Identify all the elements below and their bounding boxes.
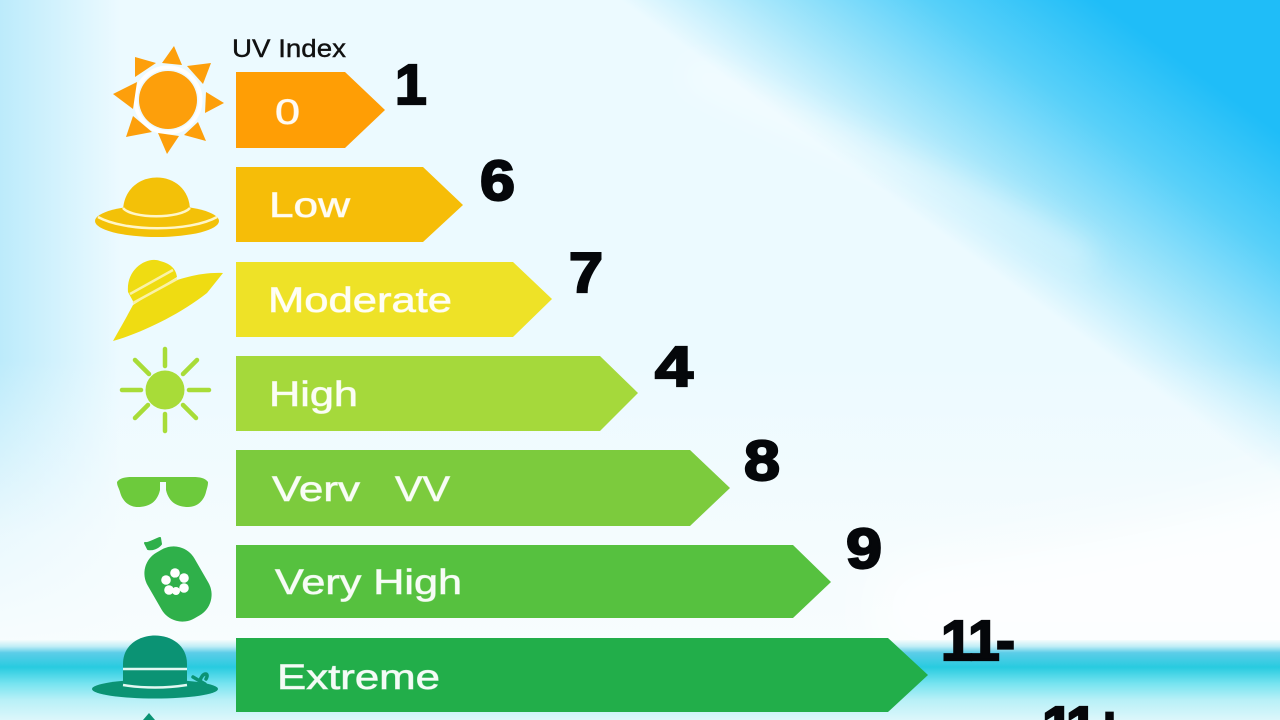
heading: UV Index: UV Index — [232, 35, 347, 63]
icon: teal hat — [92, 636, 218, 698]
value: 9: 9 — [846, 517, 882, 581]
bar: Very High — [236, 545, 831, 618]
bar: 0 — [236, 72, 385, 148]
value: 1: 1 — [395, 53, 427, 117]
value: 7: 7 — [569, 241, 603, 305]
bar: High: High — [269, 375, 358, 414]
sea horizon band — [0, 640, 1280, 720]
bar: Moderate — [236, 262, 552, 337]
bar: 0: 0 — [275, 93, 300, 132]
value: 6: 6 — [480, 149, 515, 213]
bar: Low — [236, 167, 463, 242]
bar: Low: Low — [269, 186, 351, 225]
bar: Very VV: VV — [395, 470, 451, 509]
bar: Very VV: Verv — [272, 470, 361, 509]
value: 11-: 11- — [941, 609, 1015, 673]
bar: High — [236, 356, 638, 431]
bar: Very High: Very High — [275, 563, 462, 602]
bar: Extreme — [236, 638, 928, 712]
icon: green-yellow sun — [122, 349, 209, 431]
icon: clipped teal icon top — [143, 713, 155, 720]
value: 4: 4 — [655, 335, 693, 399]
bar: Very VV — [236, 450, 730, 526]
value: 8: 8 — [744, 429, 780, 493]
icon: orange sun — [113, 46, 224, 154]
bar: Moderate: Moderate — [268, 281, 452, 320]
bar: Extreme: Extreme — [277, 658, 440, 697]
icon: yellow-orange wide hat — [95, 178, 219, 237]
icon: sunglasses — [117, 477, 208, 507]
icon: sunscreen bottle — [136, 538, 220, 630]
icon: tilted yellow hat — [113, 260, 223, 341]
